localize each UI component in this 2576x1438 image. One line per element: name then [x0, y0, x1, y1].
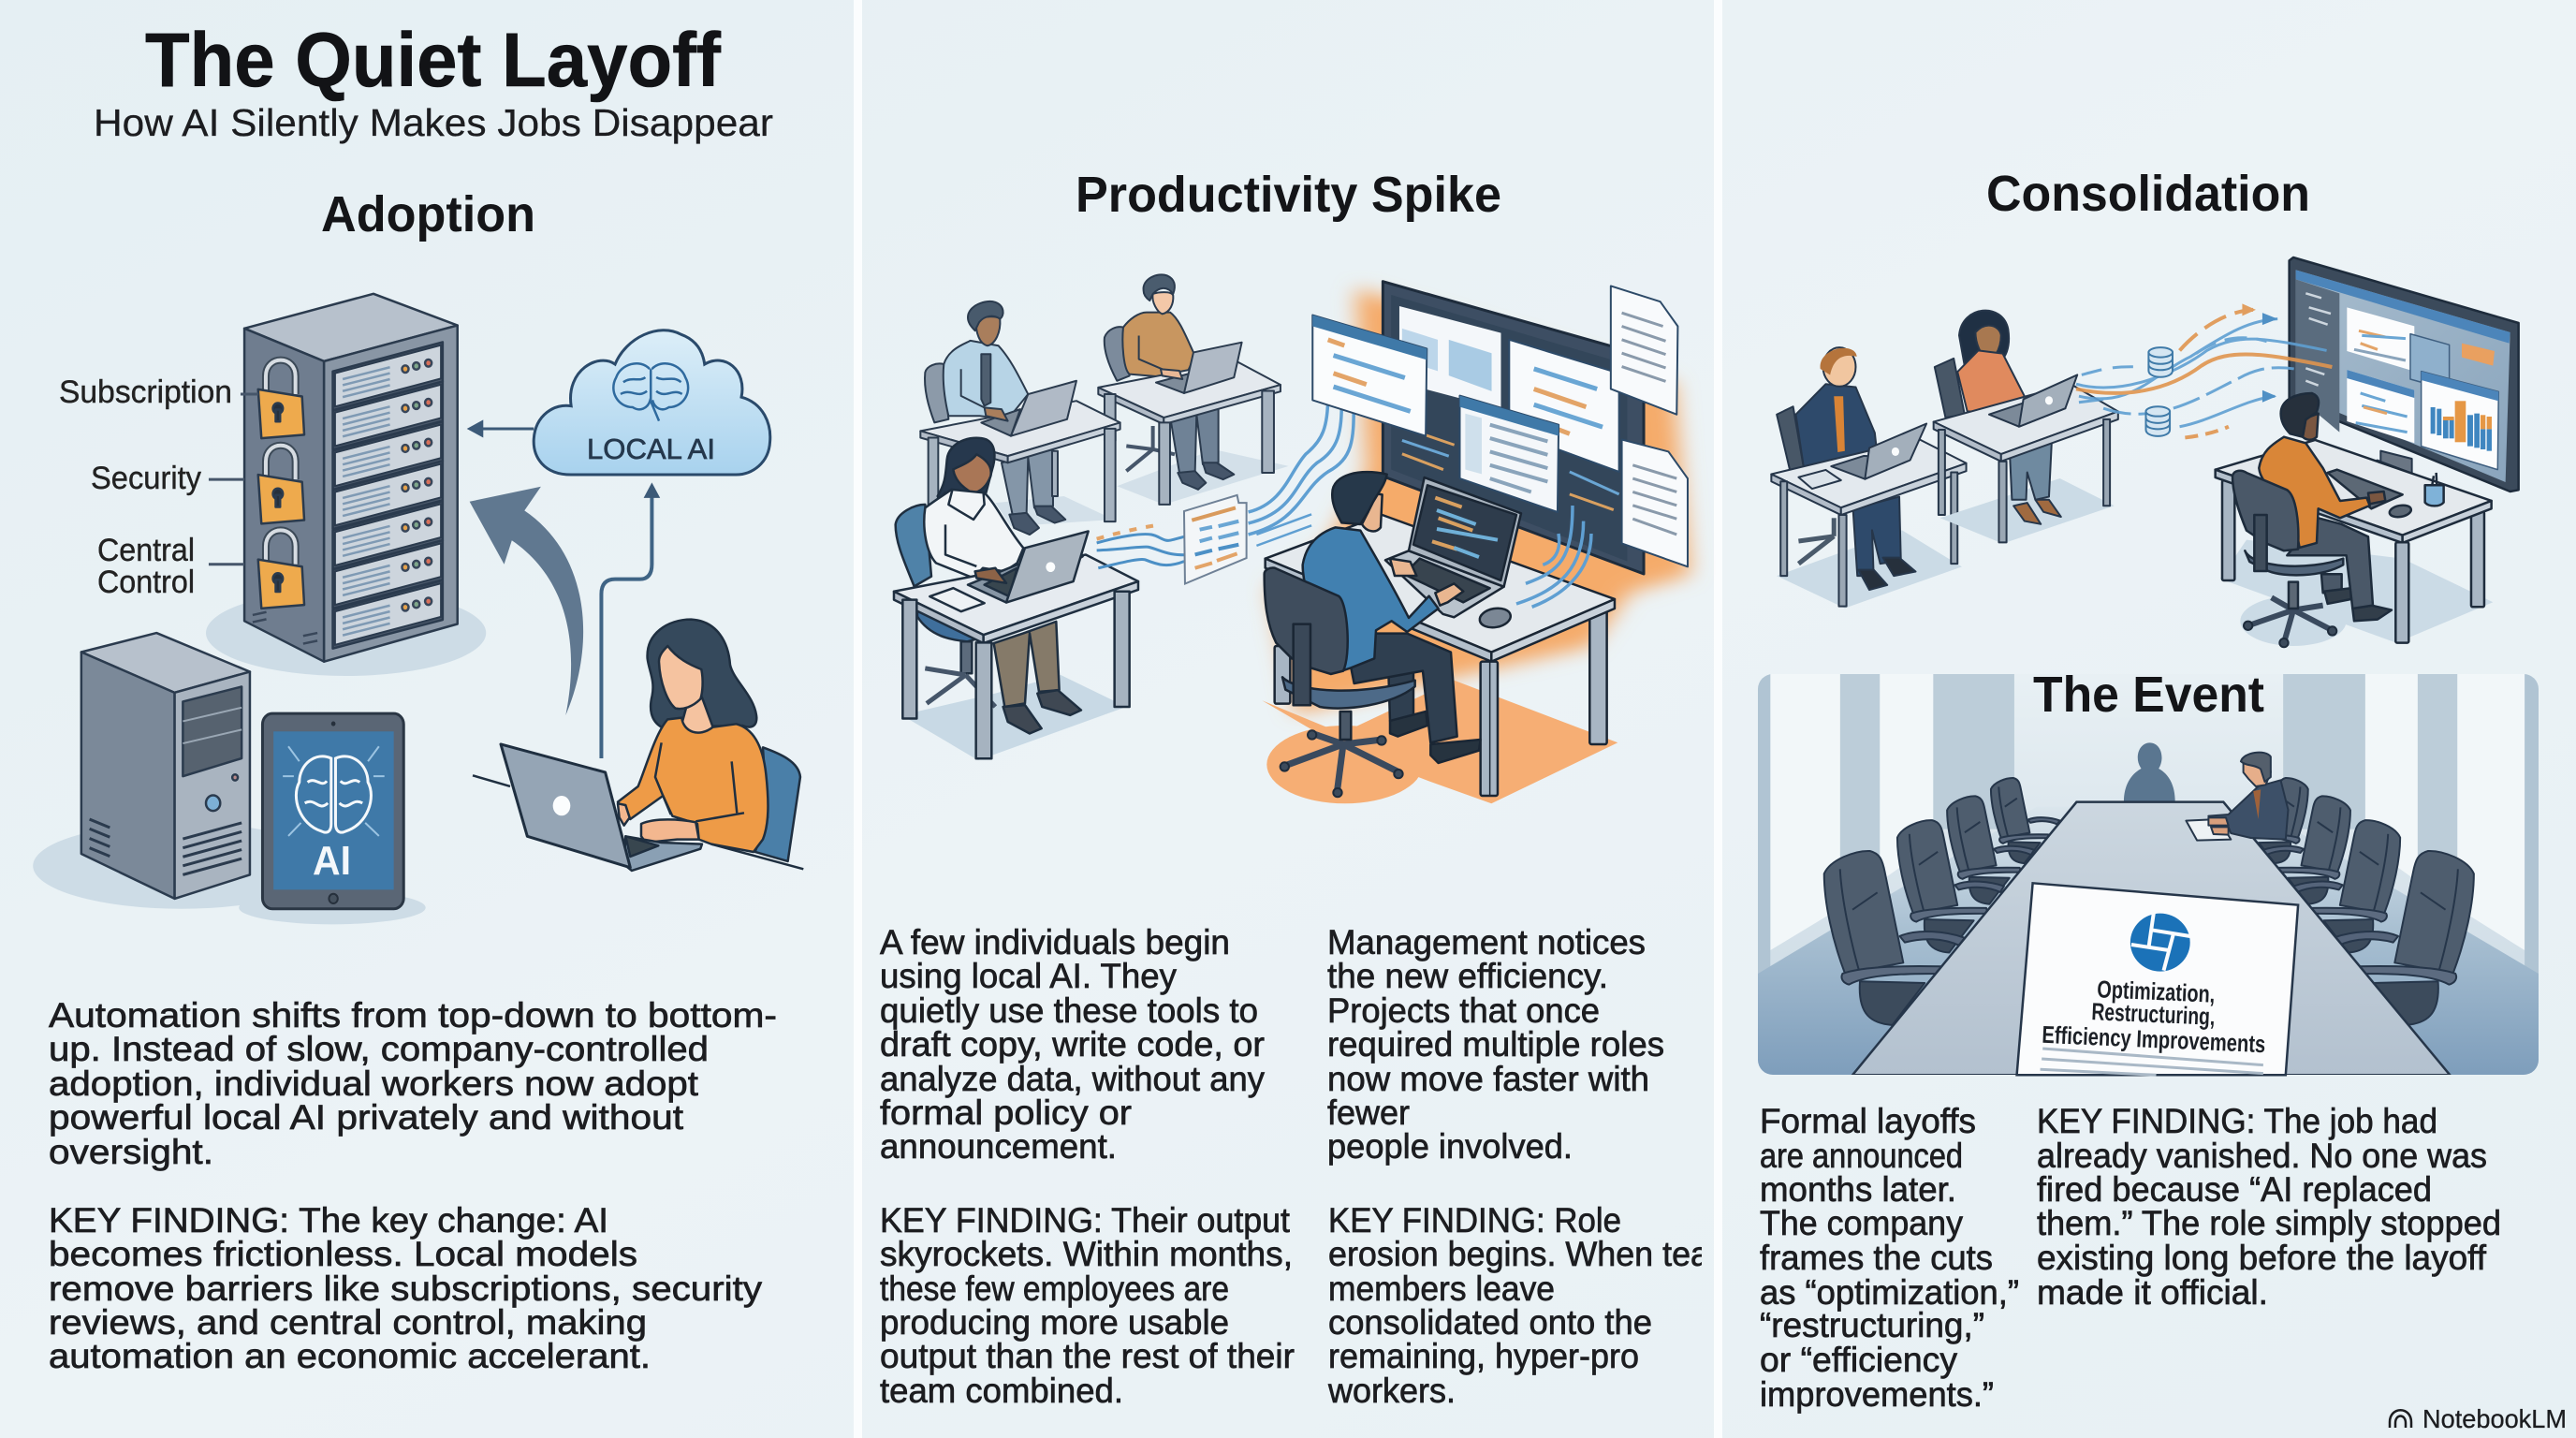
- text block: productivity right key finding: erosion begins. When tea: [1328, 1235, 1709, 1273]
- icon: woman working on laptop: [473, 620, 803, 871]
- boardroom chairs right: [2239, 778, 2474, 1025]
- text block: event body: Formal layoffs: [1760, 1102, 1976, 1140]
- text block: event key finding: fired because “AI replaced: [2037, 1170, 2432, 1209]
- text block: event body: as “optimization,”: [1760, 1273, 2019, 1312]
- text block: productivity right key finding: remaining, hyper-pro: [1328, 1337, 1639, 1375]
- text block: productivity left column: A few individuals begin: [880, 923, 1230, 961]
- text block: event key finding: [2037, 1102, 2501, 1312]
- subtitle: How AI Silently Makes Jobs Disappear: [94, 101, 773, 144]
- text block: event key finding: made it official.: [2037, 1273, 2268, 1312]
- text block: adoption body: adoption, individual workers now adopt: [49, 1064, 699, 1103]
- table: [1852, 802, 2450, 1075]
- text block: productivity left key finding: producing more usable: [880, 1303, 1229, 1342]
- label: central control: Central: [97, 533, 195, 568]
- text block: adoption key finding: becomes frictionless. Local models: [49, 1235, 637, 1273]
- text block: adoption key finding: remove barriers like subscriptions, security: [49, 1269, 763, 1308]
- title: The Quiet Layoff: [145, 18, 722, 103]
- document on table: Optimization,: [2097, 975, 2216, 1008]
- text block: adoption key finding: [49, 1201, 763, 1375]
- text block: productivity left key finding: output than the rest of their: [880, 1337, 1295, 1375]
- icon: large monitor with windows: [1312, 282, 1688, 574]
- icon: data cylinders: [2145, 347, 2173, 436]
- icon: local AI cloud: [534, 330, 770, 475]
- watermark: NotebookLM: NotebookLM: [2422, 1404, 2567, 1433]
- text block: event body: frames the cuts: [1760, 1239, 1993, 1277]
- text block: event key finding: KEY FINDING: The job had: [2037, 1102, 2437, 1140]
- panel: productivity spike: [880, 167, 1709, 1410]
- icon: server tower with locks: [206, 294, 486, 676]
- wall columns: [1840, 674, 2458, 858]
- icon: floating document: [1184, 495, 1247, 584]
- text block: productivity right column: Management notices: [1327, 923, 1646, 961]
- label: security: Security: [91, 461, 201, 496]
- icon: desktop tower: [33, 633, 329, 909]
- panel dividers: [854, 0, 1722, 1438]
- text block: adoption body: up. Instead of slow, company-controlled: [49, 1030, 709, 1068]
- silhouette attendee: [2124, 742, 2175, 802]
- text block: event key finding: already vanished. No one was: [2037, 1137, 2487, 1175]
- text block: productivity right key finding: workers.: [1327, 1372, 1456, 1410]
- text block: event body: are announced: [1760, 1137, 1963, 1175]
- text block: event key finding: existing long before the layoff: [2037, 1239, 2487, 1277]
- text block: productivity left key finding: [880, 1201, 1295, 1410]
- text block: productivity left key finding: these few employees are: [880, 1269, 1229, 1308]
- arrows: consolidation data flows: [2076, 303, 2332, 437]
- text block: productivity right column: fewer: [1327, 1093, 1410, 1132]
- text block: productivity left key finding: KEY FINDING: Their output: [880, 1201, 1291, 1240]
- text block: event body: [1760, 1102, 2019, 1414]
- text block: productivity left key finding: skyrockets. Within months,: [880, 1235, 1293, 1273]
- text block: productivity left column: draft copy, write code, or: [880, 1025, 1265, 1064]
- man at table: [2186, 753, 2288, 841]
- text block: productivity right key finding: KEY FINDING: Role: [1328, 1201, 1621, 1240]
- text block: productivity right column: people involved.: [1327, 1127, 1573, 1166]
- panel: adoption: [33, 18, 803, 1375]
- text block: productivity left column: analyze data, without any: [880, 1060, 1265, 1098]
- floor: [1758, 807, 2539, 1078]
- document on table: Efficiency Improvements: [2042, 1020, 2266, 1058]
- heading: the event: The Event: [2033, 667, 2264, 723]
- text block: productivity right key finding: members leave: [1328, 1269, 1555, 1308]
- text block: productivity right key finding: [1327, 1201, 1709, 1410]
- text block: adoption key finding: reviews, and central control, making: [49, 1303, 647, 1342]
- text block: productivity right column: required multiple roles: [1327, 1025, 1664, 1064]
- text block: adoption body: oversight.: [49, 1133, 213, 1171]
- illustration: orange glow and floor: [1262, 288, 1690, 803]
- text block: adoption key finding: KEY FINDING: The key change: AI: [49, 1201, 608, 1240]
- label: subscription: Subscription: [59, 374, 232, 410]
- arrows: data flow to windows: [1249, 396, 1354, 546]
- text block: productivity left column: formal policy or: [880, 1093, 1132, 1132]
- text block: adoption body: powerful local AI privately and without: [49, 1098, 684, 1137]
- illustration: man in suit at desk: [1771, 347, 1967, 609]
- document on table: [2017, 883, 2298, 1075]
- text block: adoption key finding: automation an economic accelerant.: [49, 1337, 651, 1375]
- icon: consolidated monitor with chart: [2290, 257, 2519, 492]
- text block: adoption body: [49, 996, 777, 1171]
- arrows: data flow to document: [1097, 524, 1192, 568]
- illustration: remaining worker at desk: [2216, 393, 2493, 647]
- panel: consolidation and the event: [1758, 166, 2567, 1433]
- text block: productivity right column: [1327, 923, 1664, 1166]
- arrow: cloud to server: [467, 419, 534, 438]
- text block: productivity left column: quietly use these tools to: [880, 991, 1258, 1030]
- text block: productivity left column: [880, 923, 1265, 1166]
- icon: tablet with AI brain: [239, 713, 426, 924]
- illustration: back left worker: [920, 301, 1120, 535]
- label: central control: [97, 533, 195, 600]
- text block: event body: improvements.”: [1760, 1375, 1994, 1414]
- icon: tablet with AI brain: AI: [313, 838, 351, 884]
- icon: aperture logo: [2130, 913, 2190, 972]
- text block: event body: or “efficiency: [1760, 1341, 1957, 1379]
- illustration: back right worker: [1098, 274, 1289, 505]
- heading: consolidation: Consolidation: [1986, 166, 2310, 222]
- text block: event key finding: them.” The role simply stopped: [2037, 1204, 2501, 1242]
- panel: the event boardroom: [1758, 669, 2539, 1078]
- text block: productivity right column: Projects that once: [1327, 991, 1600, 1030]
- illustration: central hyper-productive worker: [1265, 472, 1615, 797]
- text block: productivity left key finding: team combined.: [880, 1372, 1123, 1410]
- arrow: worker to cloud: [601, 482, 660, 758]
- heading: adoption: Adoption: [321, 186, 535, 242]
- text block: event body: “restructuring,”: [1760, 1306, 1984, 1344]
- text block: adoption body: Automation shifts from top-down to bottom-: [49, 996, 777, 1034]
- heading: productivity spike: Productivity Spike: [1076, 167, 1501, 223]
- text block: productivity left column: using local AI. They: [880, 957, 1177, 995]
- boardroom chairs left: [1824, 778, 2059, 1025]
- text block: event body: The company: [1760, 1204, 1963, 1242]
- document on table: Restructuring,: [2091, 997, 2216, 1031]
- text block: productivity right column: now move faster with: [1327, 1060, 1649, 1098]
- label: central control: Control: [97, 565, 195, 600]
- text block: productivity left column: announcement.: [880, 1127, 1117, 1166]
- arrow: large curved upward arrow: [470, 487, 583, 715]
- illustration: woman at desk: [1934, 311, 2118, 544]
- text block: event body: months later.: [1760, 1170, 1956, 1209]
- text block: productivity right key finding: consolidated onto the: [1328, 1303, 1652, 1342]
- icon: local AI cloud: LOCAL AI: [587, 433, 715, 465]
- illustration: front left worker: [894, 438, 1138, 760]
- text block: productivity right column: the new efficiency.: [1327, 957, 1608, 995]
